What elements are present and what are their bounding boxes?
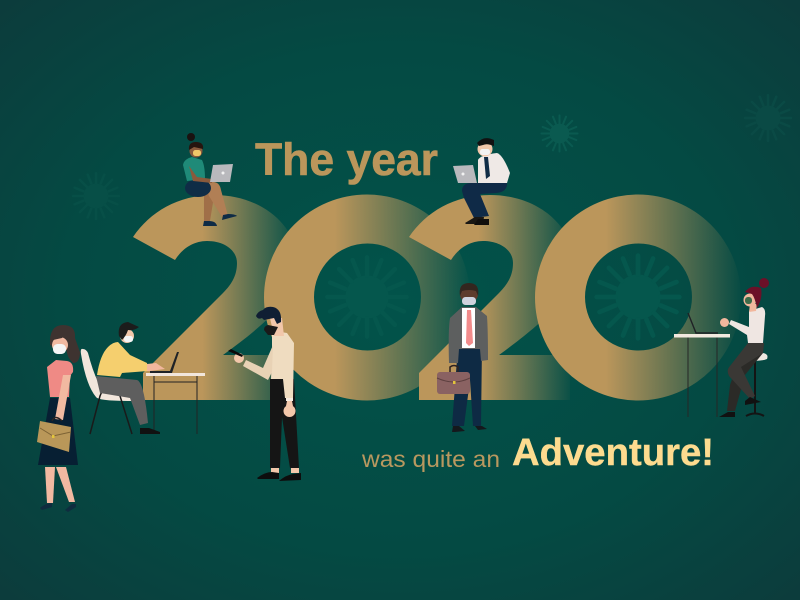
digit 2 second [409,195,574,400]
figure: man with phone [228,307,301,481]
figure: woman with laptop sitting on the 2 [183,133,237,226]
virus decoration: left [73,173,119,219]
text: was quite an: was quite an [361,446,500,472]
digit 0 second [535,194,741,400]
large number 2020 [133,194,741,400]
digit 2 first [133,195,298,400]
text: Adventure!: Adventure! [512,432,714,474]
chair [81,349,135,434]
virus inside first zero [327,257,407,337]
table [674,313,730,417]
heading: The year: The year [255,134,438,185]
figure: woman at high table [674,278,769,417]
virus inside second zero [597,256,679,338]
digit 0 first [264,194,470,400]
figure: man with laptop sitting on the 2 [453,138,510,225]
figure: walking woman with briefcase [37,325,80,512]
figure: man in suit with briefcase [437,283,488,432]
virus decoration: top right [745,95,791,141]
figure: man at laptop on chair [81,322,205,434]
table [146,373,205,434]
stool [746,353,768,416]
virus decoration: top centre [541,115,578,152]
